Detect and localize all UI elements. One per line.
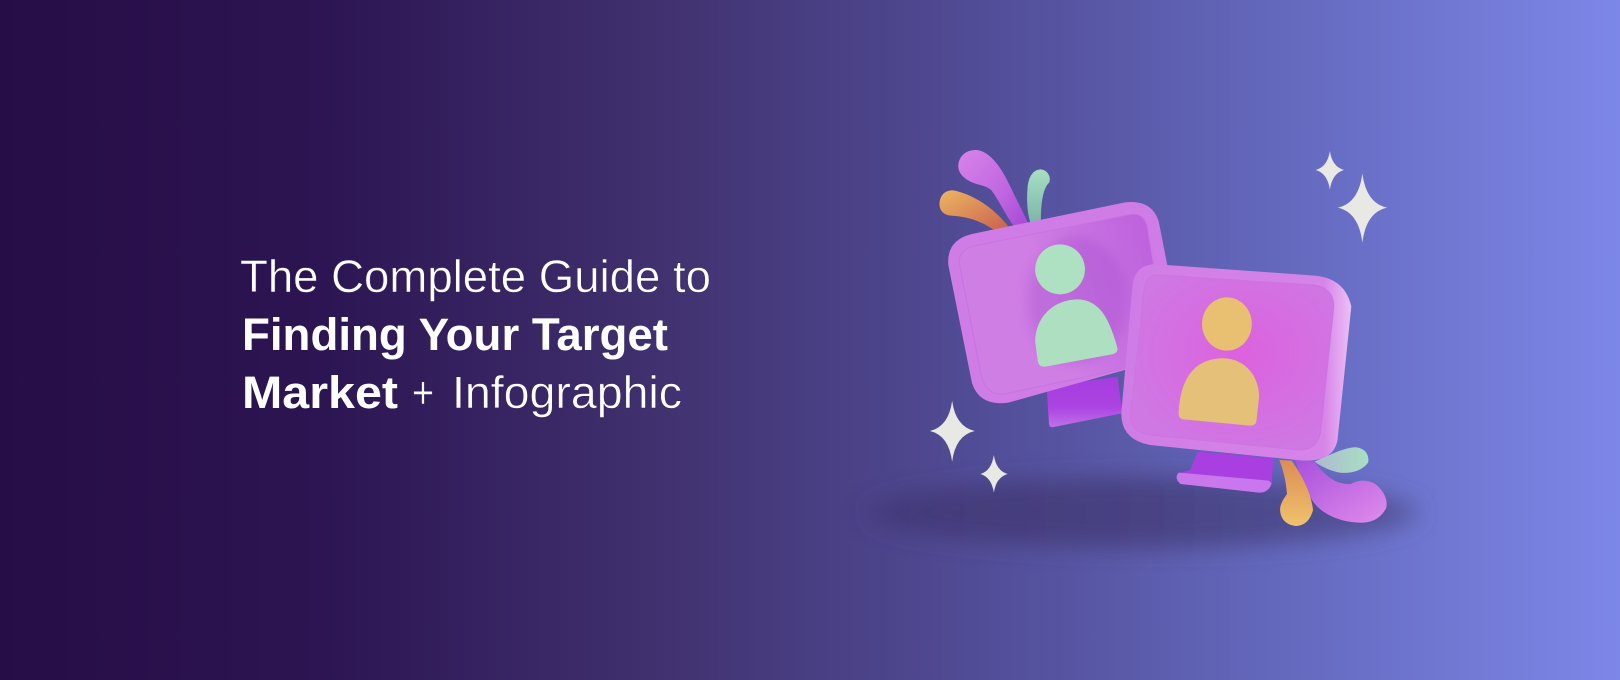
left user shadow	[1028, 237, 1127, 363]
sparkle large bottom left	[930, 401, 975, 462]
splash: top-left	[939, 150, 1050, 231]
splash orange	[939, 190, 1008, 231]
left user head	[1035, 244, 1085, 294]
right user head	[1202, 297, 1252, 351]
sparkles	[930, 151, 1387, 493]
splash purple	[958, 150, 1028, 227]
splash orange	[1279, 460, 1313, 526]
splash: bottom-right	[1279, 447, 1387, 526]
ground shadow	[869, 478, 1416, 548]
right monitor screen	[1131, 275, 1334, 450]
title line 2: Finding Your Target	[242, 309, 668, 360]
left monitor	[948, 202, 1184, 427]
left user body	[1035, 299, 1118, 367]
right monitor stand	[1177, 452, 1273, 493]
left user icon	[1035, 244, 1118, 367]
splash green	[1027, 169, 1050, 222]
title	[240, 251, 711, 418]
title line 3: +	[412, 367, 434, 418]
sparkle small top right	[1316, 151, 1344, 190]
title line 1: The Complete Guide to	[240, 251, 711, 302]
left monitor frame	[948, 202, 1184, 403]
splash purple	[1295, 460, 1387, 523]
right monitor frame	[1121, 264, 1351, 461]
right user body	[1179, 358, 1259, 426]
right user icon	[1179, 297, 1259, 426]
title line 3	[242, 367, 682, 418]
splash green	[1315, 447, 1368, 473]
title line 3: Market	[242, 367, 398, 418]
right monitor	[1121, 264, 1351, 493]
left monitor stand	[1047, 377, 1122, 427]
title line 3: Infographic	[452, 367, 682, 418]
sparkle large top right	[1338, 173, 1387, 243]
left monitor screen	[959, 214, 1169, 394]
illustration: two monitors with user icons	[869, 150, 1416, 548]
sparkle small bottom left	[980, 455, 1008, 493]
